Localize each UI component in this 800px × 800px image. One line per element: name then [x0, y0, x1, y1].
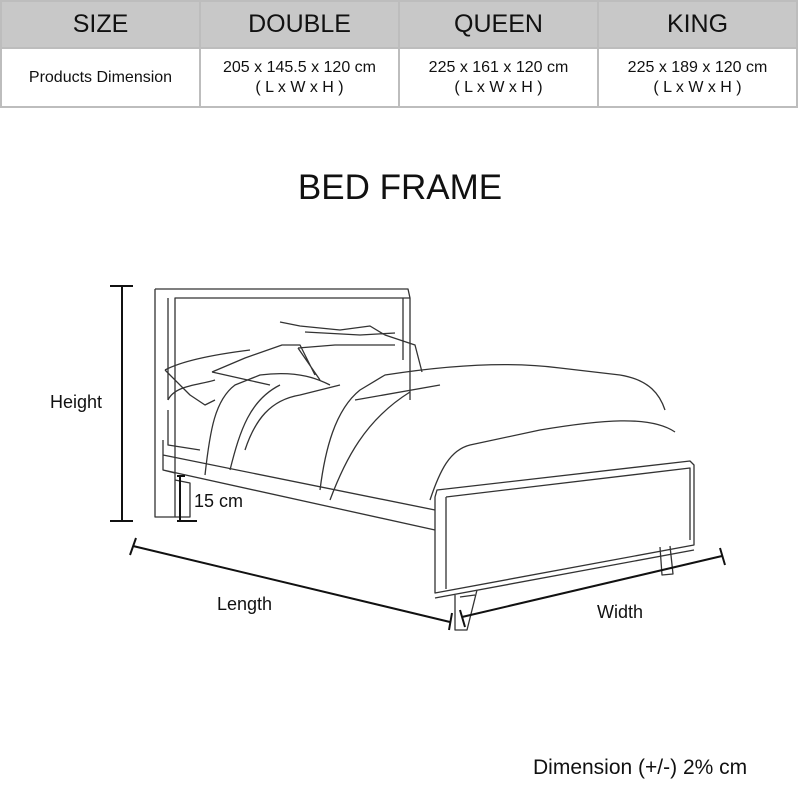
size table: 225 x 161 x 120 cm — [429, 58, 568, 76]
size table: ( L x W x H ) — [255, 78, 344, 96]
size table: SIZE — [73, 10, 128, 38]
tolerance note: Dimension (+/-) 2% cm — [533, 756, 747, 779]
size table: QUEEN — [454, 10, 543, 38]
label: height: Height — [50, 392, 102, 412]
size table: 225 x 189 x 120 cm — [628, 58, 767, 76]
footboard — [435, 461, 694, 598]
label: width: Width — [597, 602, 643, 622]
size table: Products Dimension — [29, 68, 172, 86]
title: BED FRAME — [298, 168, 502, 207]
size table: DOUBLE — [248, 10, 351, 38]
size table: 205 x 145.5 x 120 cm — [223, 58, 376, 76]
size table: ( L x W x H ) — [454, 78, 543, 96]
dimension lines — [110, 286, 725, 630]
mattress & blanket — [168, 365, 675, 500]
legs — [455, 546, 673, 630]
label: length: Length — [217, 594, 272, 614]
size table: KING — [667, 10, 728, 38]
pillows — [165, 322, 422, 405]
label: 15 cm: 15 cm — [194, 491, 243, 511]
size table: ( L x W x H ) — [653, 78, 742, 96]
side rail & leg — [163, 440, 435, 530]
size table — [0, 0, 798, 108]
headboard — [155, 289, 410, 517]
